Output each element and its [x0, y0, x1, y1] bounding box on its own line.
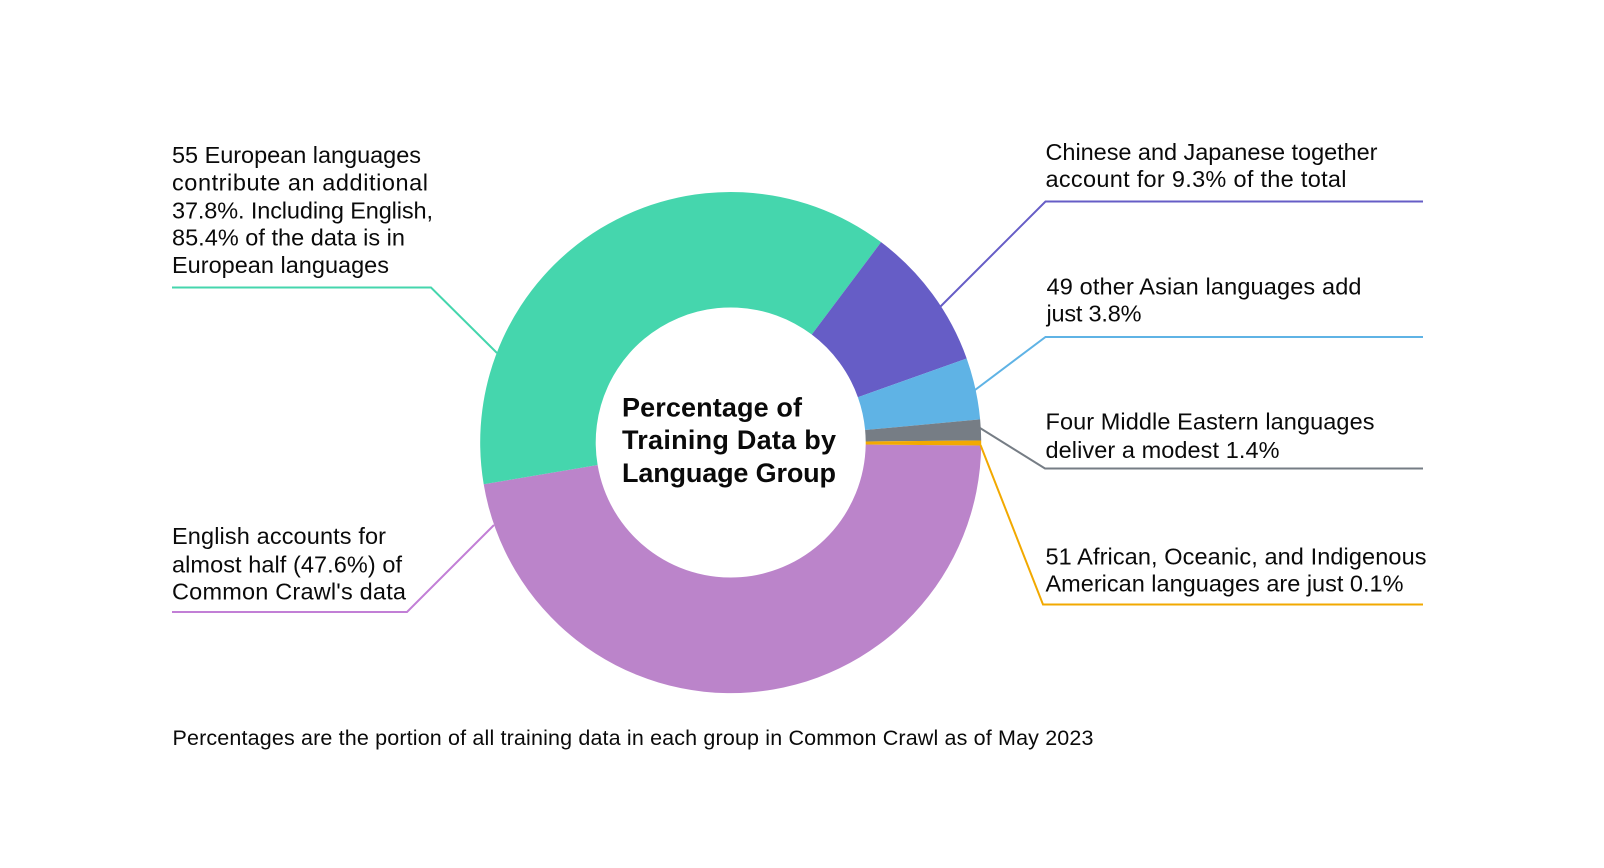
segment: African, Oceanic, Indigenous American 0.1%	[866, 440, 981, 446]
callout: English: almost half (47.6%) of	[172, 552, 402, 578]
callout: European languages: 37.8%. Including English,	[172, 198, 433, 224]
callout: English: Common Crawl's data	[172, 578, 407, 604]
callout: Middle Eastern languages	[980, 408, 1423, 468]
callout: English	[172, 523, 494, 612]
callout: other Asian languages	[975, 274, 1423, 390]
callout: English: English accounts for	[172, 523, 386, 549]
center title: Training Data by	[622, 425, 836, 455]
center title: Percentage of	[622, 392, 803, 422]
callout: Middle Eastern languages: Four Middle Eastern languages	[1046, 408, 1374, 434]
donut chart	[480, 192, 981, 693]
callout: African, Oceanic, Indigenous American languages	[980, 445, 1426, 604]
segment: Chinese and Japanese 9.3%	[812, 242, 967, 397]
callout: European languages: 85.4% of the data is in	[172, 224, 405, 250]
callout: African, Oceanic, Indigenous American languages: 51 African, Oceanic, and Indigenous	[1046, 544, 1426, 570]
callout: Chinese and Japanese: Chinese and Japanese together	[1046, 139, 1378, 165]
callout: Chinese and Japanese	[940, 139, 1423, 306]
segment: Middle Eastern 1.4%	[865, 419, 981, 442]
callout: Chinese and Japanese: account for 9.3% of the total	[1046, 166, 1346, 192]
segment: English 47.6%	[484, 444, 981, 693]
segment: other Asian 3.8%	[858, 358, 980, 430]
center title: Language Group	[622, 458, 836, 488]
callout: African, Oceanic, Indigenous American languages: American languages are just 0.1%	[1046, 570, 1404, 596]
callout: European languages	[172, 142, 497, 353]
callout: European languages: contribute an additional	[172, 170, 428, 196]
callout: other Asian languages: just 3.8%	[1046, 300, 1142, 326]
callout: other Asian languages: 49 other Asian languages add	[1046, 274, 1362, 300]
segment: European 37.8%	[480, 192, 881, 484]
callout: European languages: 55 European languages	[172, 142, 421, 168]
callout: Middle Eastern languages: deliver a modest 1.4%	[1046, 437, 1280, 463]
center title	[622, 392, 836, 488]
footnote: Percentages are the portion of all training data in each group in Common Crawl as of May 2023	[172, 726, 1094, 750]
callout: European languages: European languages	[172, 252, 389, 278]
